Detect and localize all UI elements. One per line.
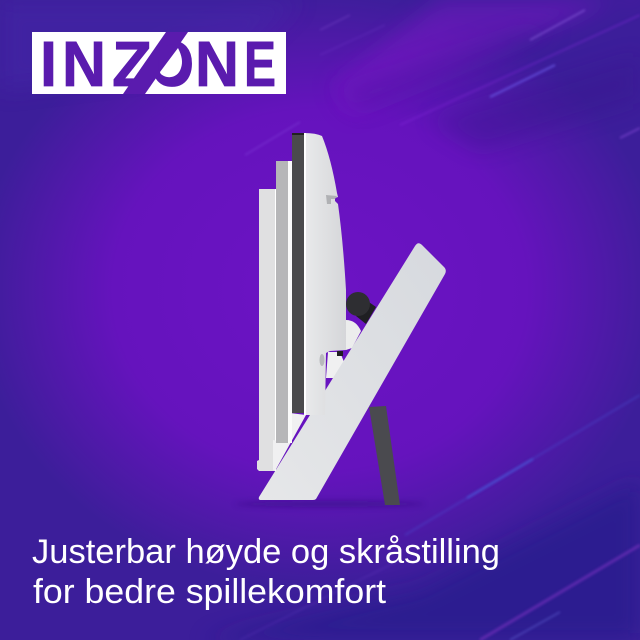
logo wordmark: N bbox=[195, 28, 239, 100]
caption line 1: Justerbar høyde og skråstilling bbox=[32, 533, 500, 571]
logo wordmark bbox=[40, 28, 276, 100]
monitor stand side view bbox=[257, 133, 446, 505]
logo slash bbox=[123, 32, 188, 94]
caption line 2: for bedre spillekomfort bbox=[33, 573, 387, 611]
logo wordmark: I bbox=[40, 28, 57, 100]
top screen panel bbox=[292, 133, 304, 413]
middle screen position bbox=[273, 161, 306, 471]
logo wordmark: Z bbox=[112, 28, 152, 100]
ground shadow bbox=[235, 501, 425, 507]
lowest screen position bbox=[257, 189, 276, 471]
logo wordmark: O bbox=[150, 28, 194, 100]
caption bbox=[32, 533, 500, 611]
logo wordmark: E bbox=[244, 28, 276, 100]
logo: INZONE bbox=[32, 28, 286, 100]
vent notch bbox=[326, 195, 337, 204]
pivot joint bbox=[326, 292, 376, 378]
logo wordmark: N bbox=[62, 28, 106, 100]
monitor back housing bbox=[304, 133, 346, 415]
O teardrop counter bbox=[160, 48, 182, 77]
O counter fill bbox=[158, 44, 186, 84]
slanted stand base bbox=[259, 243, 446, 500]
logo plate bbox=[32, 32, 286, 94]
rear stand leg bbox=[369, 406, 400, 505]
adjustment screw bbox=[320, 354, 324, 366]
